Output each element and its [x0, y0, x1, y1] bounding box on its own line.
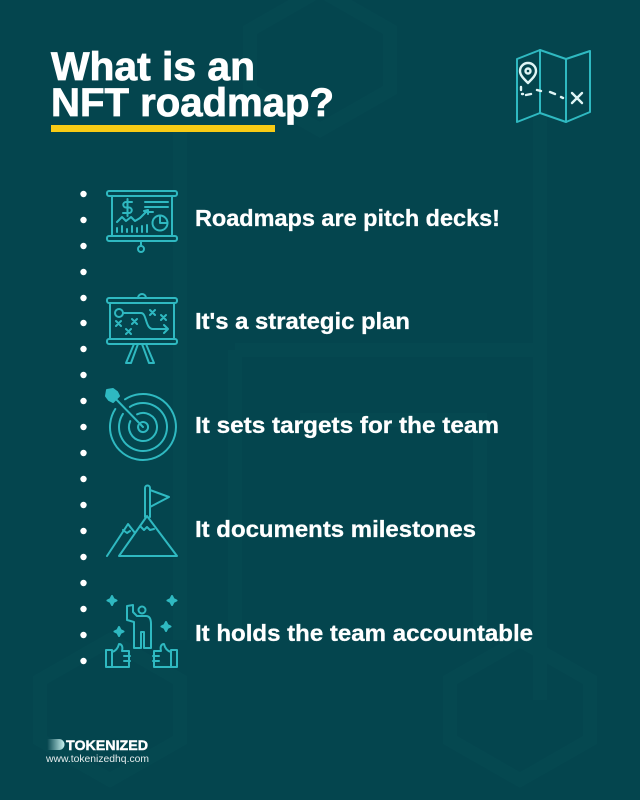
icon: target with arrow	[106, 389, 176, 460]
icon: pitch deck presentation board	[107, 191, 177, 252]
title	[51, 45, 334, 125]
text: sets targets: It sets targets for the team	[195, 412, 499, 438]
text: strategic plan: It's a strategic plan	[195, 308, 410, 334]
icon: map	[517, 50, 590, 122]
text: holds accountable: It holds the team accountable	[195, 620, 533, 646]
title: NFT roadmap?	[51, 81, 334, 125]
icon: accountable person with thumbs up	[106, 596, 177, 667]
brand logo: TOKENIZED	[66, 738, 148, 753]
brand logo	[45, 738, 149, 765]
text: roadmaps are pitch decks: Roadmaps are pitch decks!	[195, 205, 500, 231]
brand logo: www.tokenizedhq.com	[45, 753, 149, 765]
title: What is an	[51, 45, 255, 89]
dotted timeline	[80, 191, 87, 664]
title underline	[51, 125, 275, 132]
text: documents milestones: It documents milestones	[195, 516, 476, 542]
icon: mountain with flag	[107, 486, 177, 556]
icon: strategic plan board	[107, 294, 177, 363]
